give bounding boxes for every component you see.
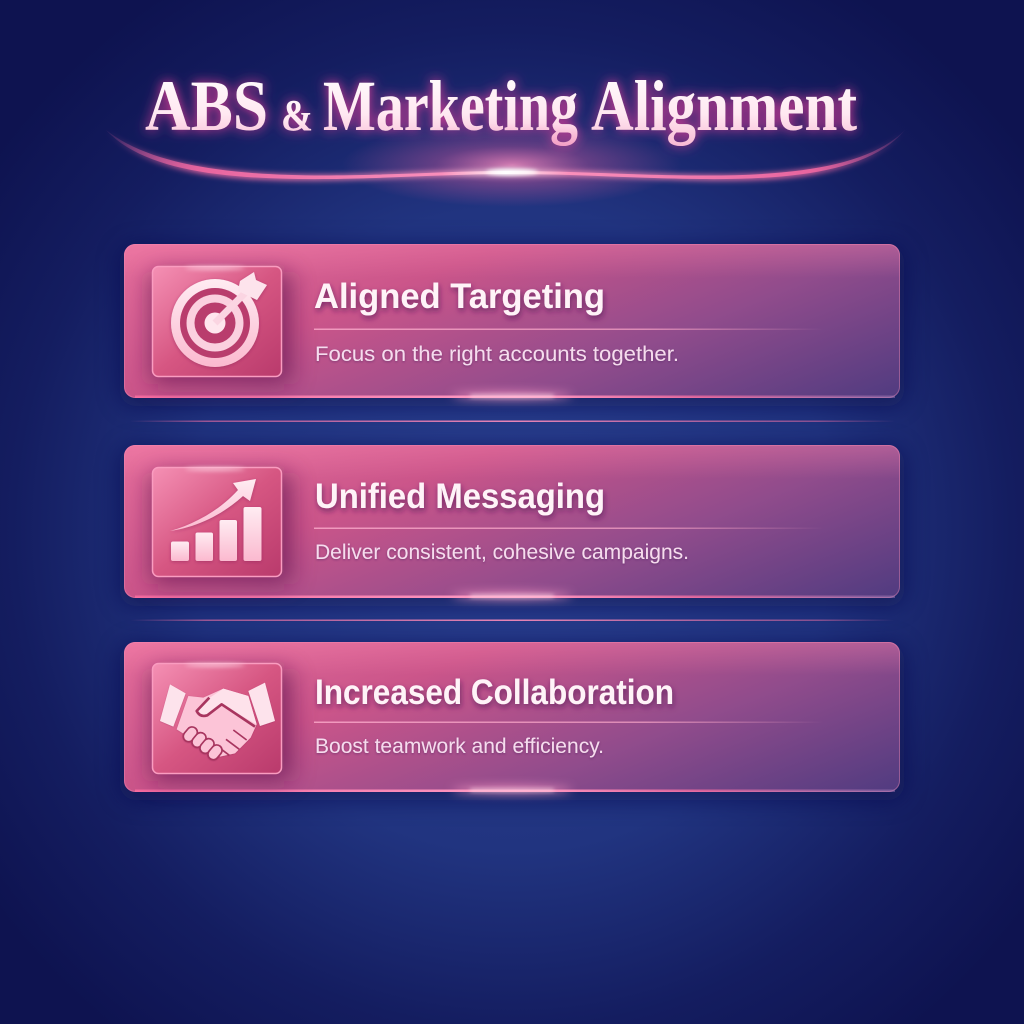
panel: aligned targeting <box>120 244 904 406</box>
heading: Aligned Targeting <box>314 277 605 316</box>
panel: unified messaging <box>120 445 904 606</box>
description: Boost teamwork and efficiency. <box>315 735 604 758</box>
panel: increased collaboration <box>120 642 904 800</box>
title text: Alignment <box>591 66 857 146</box>
description: Deliver consistent, cohesive campaigns. <box>315 541 689 564</box>
icon: rising bar chart <box>150 467 292 584</box>
title text: Marketing <box>323 66 578 146</box>
title text: & <box>281 91 313 140</box>
heading: Increased Collaboration <box>315 673 674 712</box>
heading: Unified Messaging <box>315 477 605 516</box>
title text: ABS <box>145 66 268 146</box>
icon: handshake <box>150 663 292 781</box>
description: Focus on the right accounts together. <box>315 343 679 366</box>
icon: target with arrow <box>150 266 292 384</box>
glowing underline sweep <box>106 123 905 207</box>
divider line 1 <box>130 420 895 422</box>
title with glowing sweep <box>106 66 905 207</box>
divider line 2 <box>130 620 895 621</box>
title text <box>145 66 857 146</box>
